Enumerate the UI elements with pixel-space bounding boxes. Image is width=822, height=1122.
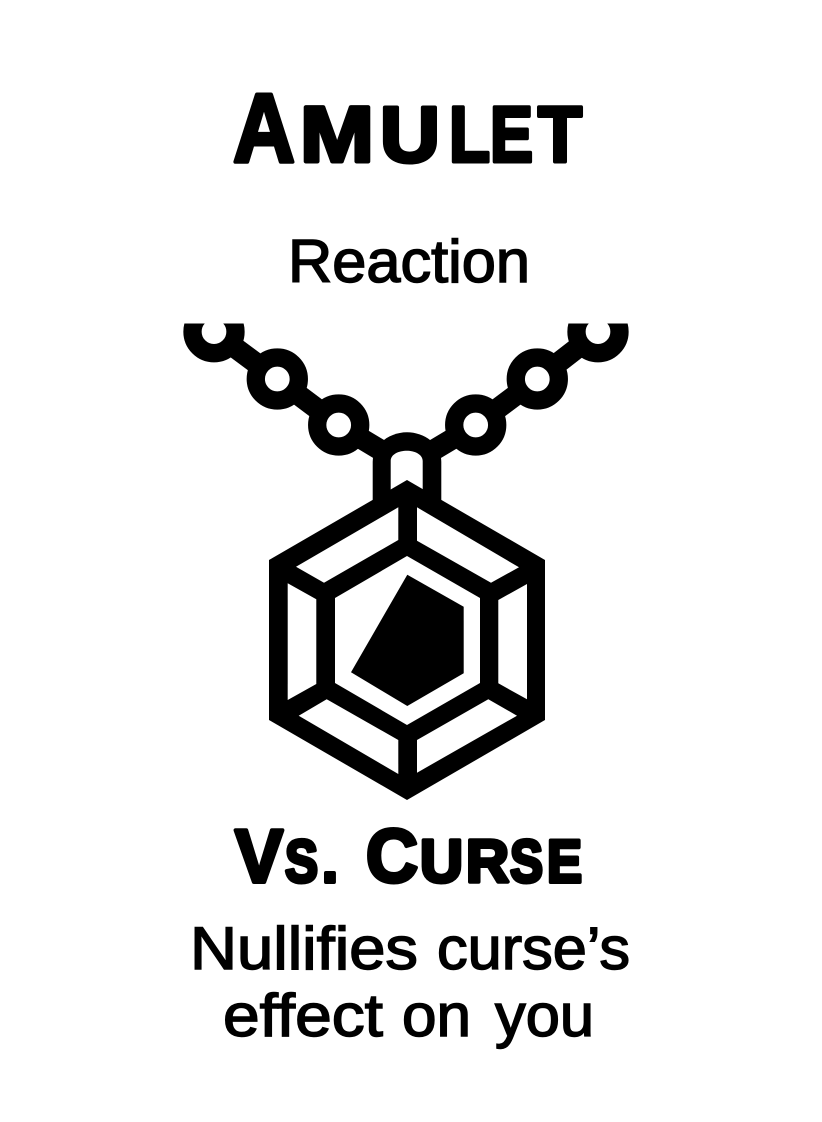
gem facets [288, 507, 527, 774]
heading: versus curse: V [235, 814, 283, 898]
effect text: curse’s [437, 915, 630, 982]
effect text: Nullifies [190, 915, 418, 982]
icon: amulet necklace [192, 310, 620, 800]
heading: versus curse: . [322, 828, 338, 895]
heading: versus curse: C [366, 814, 418, 898]
title: A [233, 74, 295, 182]
title: U [380, 90, 440, 178]
gem centre [351, 575, 464, 706]
chain [192, 310, 620, 466]
heading: versus curse: S [510, 828, 543, 895]
effect text [190, 915, 630, 1049]
effect text: you [495, 982, 594, 1049]
heading: versus curse: S [285, 828, 318, 895]
title: L [449, 90, 490, 178]
effect text: effect [223, 982, 383, 1049]
heading: versus curse: U [420, 828, 463, 895]
title: E [490, 90, 533, 178]
title: T [538, 90, 582, 178]
pendant bail [373, 432, 441, 510]
heading: versus curse: R [466, 828, 509, 895]
subtitle: card type: Reaction [288, 228, 530, 295]
gem outer frame [269, 480, 545, 800]
title: M [300, 90, 374, 178]
effect text: on [402, 982, 471, 1049]
heading: versus curse: E [547, 828, 582, 895]
